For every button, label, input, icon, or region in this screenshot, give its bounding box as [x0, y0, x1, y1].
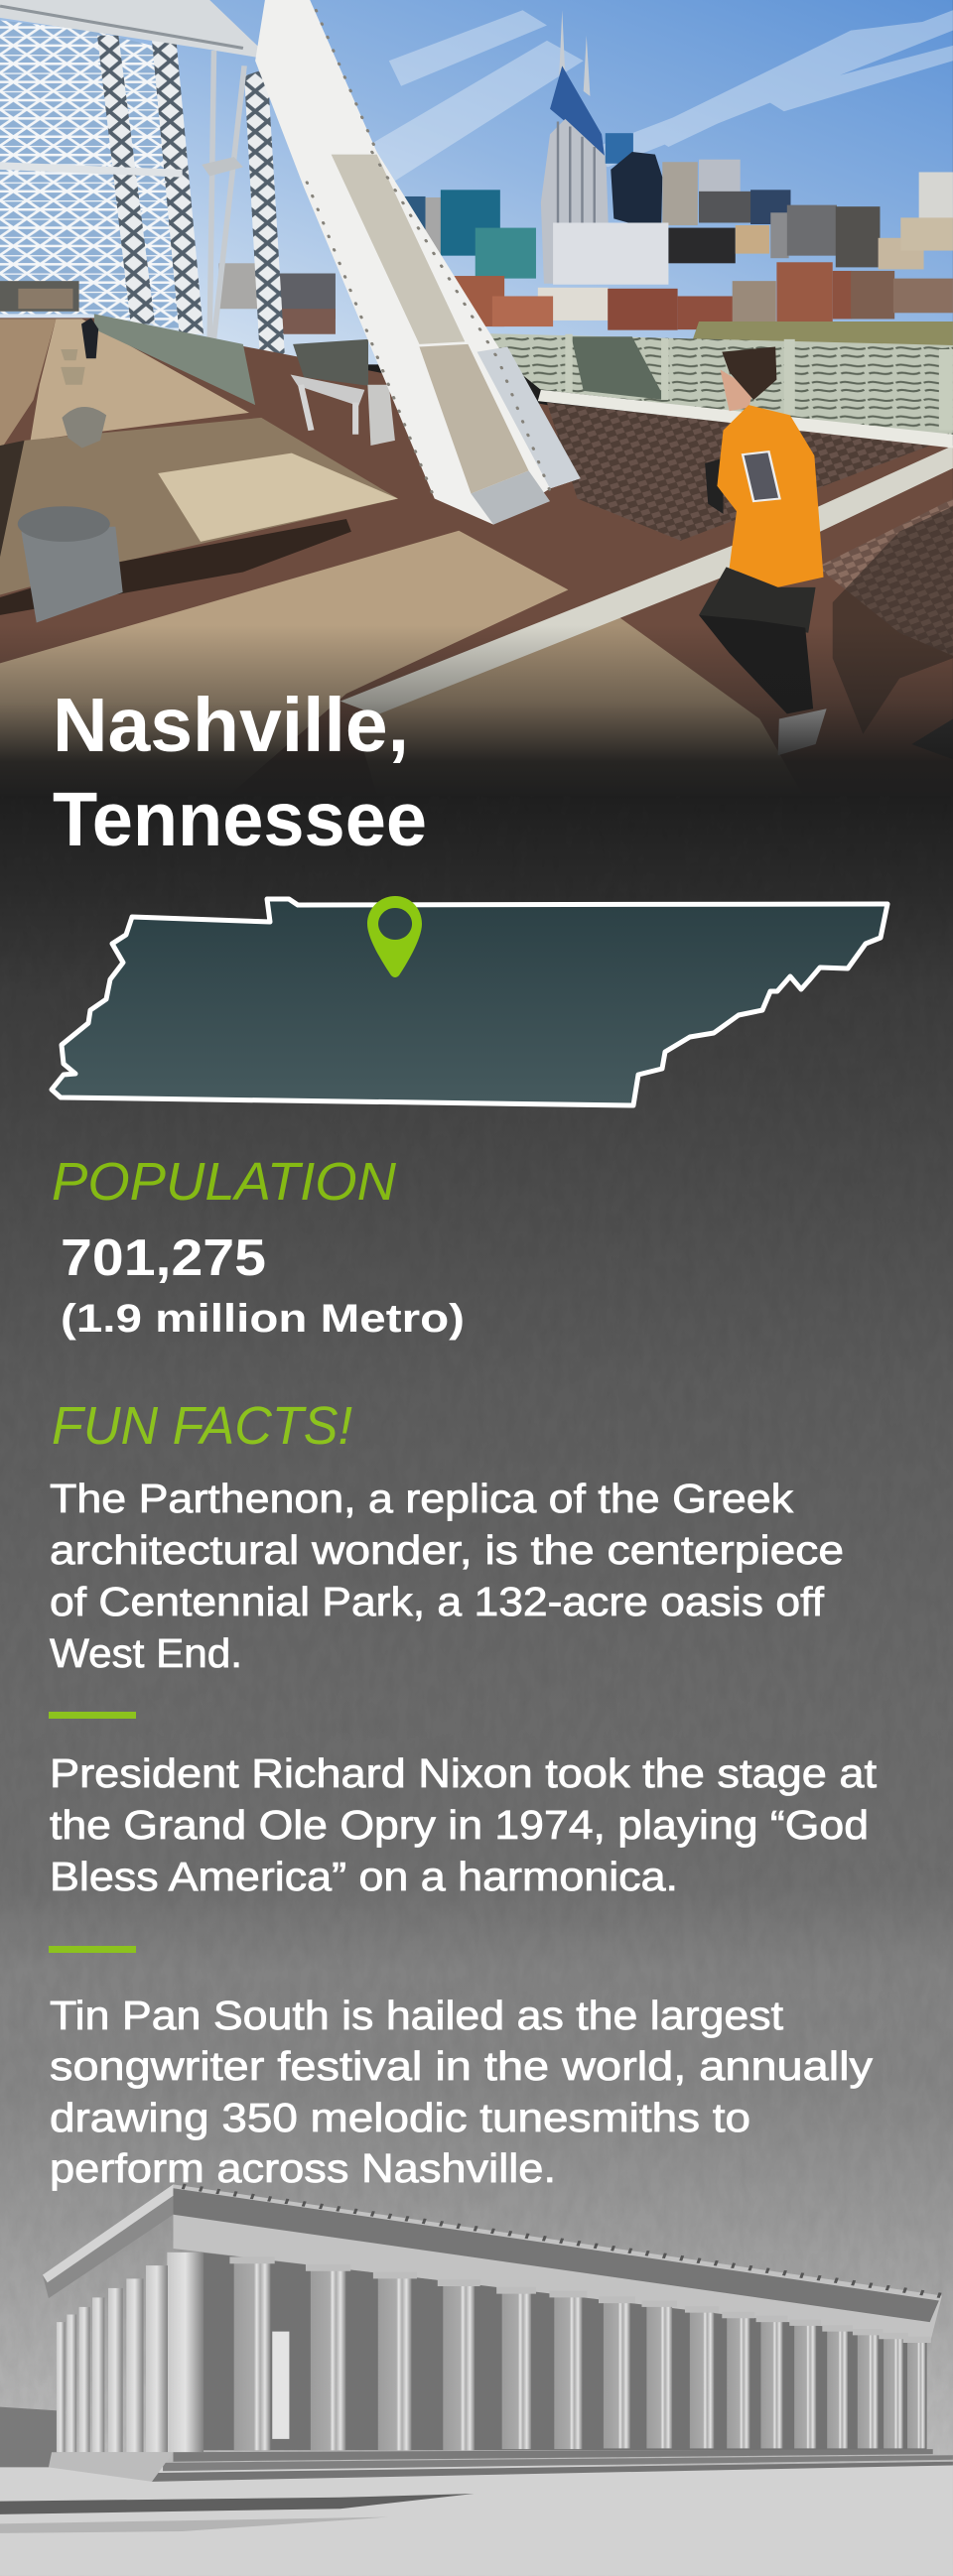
Parthenon photo	[0, 2184, 953, 2576]
runner	[699, 346, 953, 759]
map of Tennessee with location pin	[52, 896, 887, 1105]
fact 3: Tin Pan South is hailed as the largest	[50, 1993, 784, 2038]
divider 1	[49, 1712, 136, 1719]
sky	[0, 0, 953, 364]
divider 2	[49, 1946, 136, 1953]
fact 1	[50, 1476, 844, 1676]
fact 3: perform across Nashville.	[50, 2145, 556, 2191]
title: Tennessee	[53, 777, 427, 862]
fun facts heading: FUN FACTS!	[52, 1396, 352, 1456]
railings	[94, 314, 953, 449]
stool, trash can and pedestrian	[18, 318, 123, 623]
fact 1: West End.	[50, 1630, 242, 1676]
fact 3	[50, 1993, 874, 2191]
facade columns	[57, 2253, 204, 2452]
title	[53, 683, 427, 862]
steel beam	[255, 0, 581, 525]
doorway light	[272, 2332, 289, 2439]
bench	[291, 339, 395, 446]
fact 3: drawing 350 melodic tunesmiths to	[50, 2095, 750, 2140]
steps	[49, 2449, 953, 2482]
fact 1: architectural wonder, is the centerpiece	[50, 1527, 844, 1573]
entablature	[43, 2184, 942, 2339]
population label: POPULATION	[52, 1152, 397, 1212]
fact 2	[50, 1750, 878, 1899]
bridge deck	[0, 318, 953, 794]
skyline buildings	[218, 10, 953, 349]
fact 2: President Richard Nixon took the stage at	[50, 1750, 878, 1796]
dark fade under the photo	[0, 625, 953, 796]
population figures	[61, 1229, 465, 1341]
fact 2: the Grand Ole Opry in 1974, playing “God	[50, 1802, 869, 1848]
population figures: 701,275	[61, 1229, 266, 1287]
temple interior	[201, 2253, 927, 2450]
population figures: (1.9 million Metro)	[61, 1297, 465, 1341]
bridge truss	[0, 0, 288, 405]
colonnade	[234, 2261, 925, 2450]
state outline	[52, 899, 887, 1105]
fact 3: songwriter festival in the world, annually	[50, 2043, 874, 2089]
column capitals	[229, 2256, 931, 2343]
fact 2: Bless America” on a harmonica.	[50, 1854, 678, 1899]
fact 1: of Centennial Park, a 132-acre oasis off	[50, 1579, 825, 1624]
ground	[0, 2407, 953, 2576]
icon: location pin	[367, 896, 422, 977]
fact 1: The Parthenon, a replica of the Greek	[50, 1476, 794, 1521]
title: Nashville,	[53, 683, 409, 768]
photo: jogger on the pedestrian bridge with Nashville skyline	[0, 0, 953, 794]
